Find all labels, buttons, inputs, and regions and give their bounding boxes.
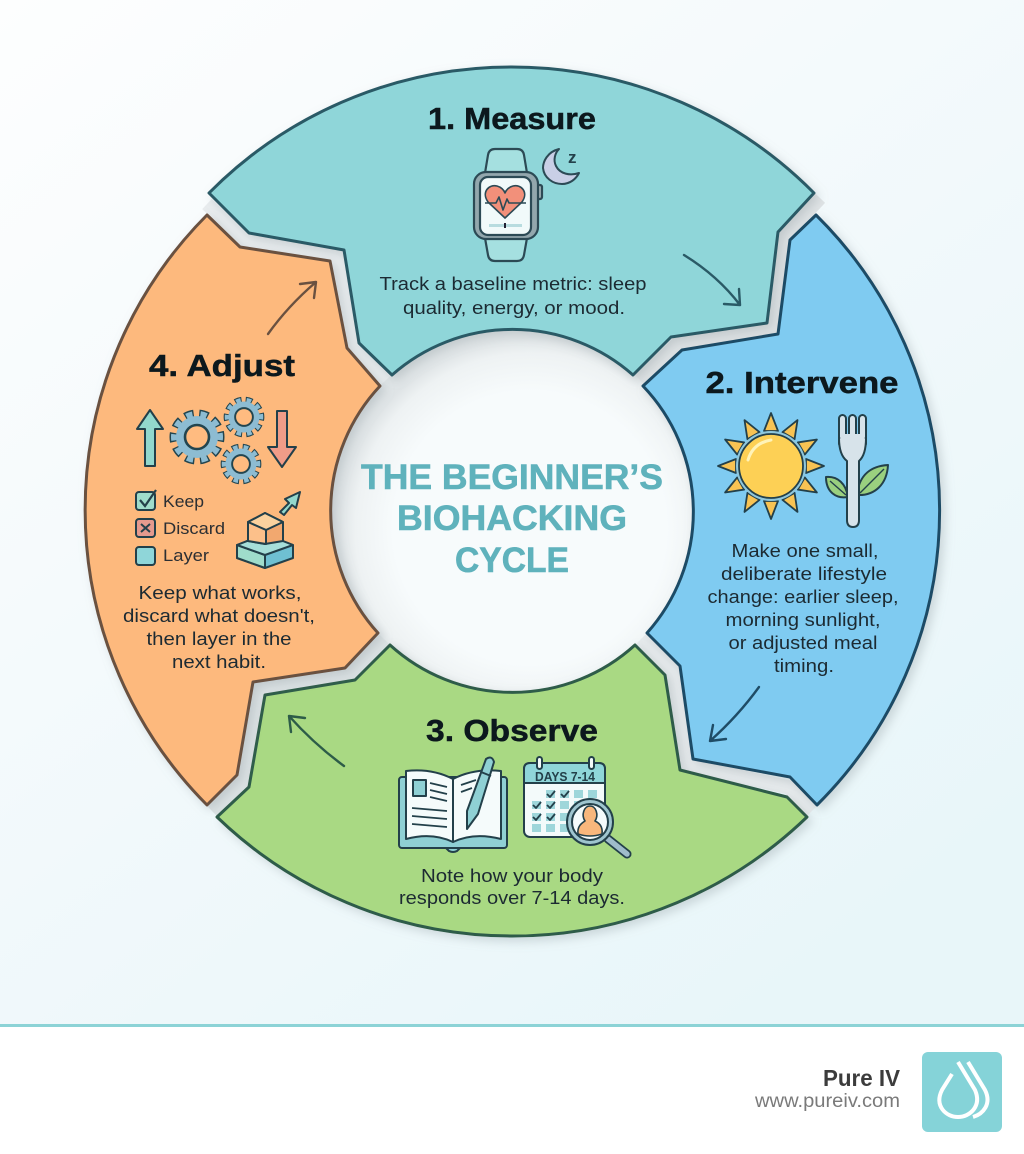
- panel: 1. Measure: [209, 67, 814, 375]
- text: intervene description: or adjusted meal: [728, 633, 878, 653]
- heading: 1. Measure: 1. Measure: [428, 101, 596, 136]
- text: adjust description: Keep what works,: [138, 583, 302, 603]
- gap shading between segments: [207, 198, 820, 811]
- title: the beginner's biohacking cycle: [361, 458, 663, 580]
- text: adjust description: [123, 583, 315, 672]
- icon: smartwatch with heart: [474, 149, 542, 261]
- panel: 3. Observe: [217, 645, 807, 936]
- legend: keep discard layer: Layer: [163, 546, 209, 565]
- icon: moon and z: z: [568, 148, 576, 167]
- heading: 4. Adjust: 4. Adjust: [149, 348, 295, 383]
- arrow: adjust to measure: [268, 282, 316, 334]
- arrow: observe to adjust: [289, 716, 344, 766]
- brand name: Pure IV: [823, 1065, 901, 1091]
- icon: down arrow: [268, 411, 296, 467]
- title: the beginner's biohacking cycle: BIOHACKING: [397, 499, 627, 538]
- text: observe description: responds over 7-14 days.: [399, 888, 625, 908]
- text: adjust description: next habit.: [172, 652, 266, 672]
- legend: keep discard layer: [136, 490, 225, 565]
- legend: keep discard layer: Discard: [163, 519, 225, 538]
- icon: up arrow: [137, 410, 163, 466]
- text: adjust description: then layer in the: [146, 629, 292, 649]
- text: measure description: Track a baseline metric: sleep: [380, 274, 646, 294]
- arrow: intervene to observe: [710, 687, 759, 741]
- website url: www.pureiv.com: [754, 1091, 900, 1112]
- segment shape: adjust: [85, 215, 380, 805]
- text: measure description: quality, energy, or mood.: [403, 298, 625, 318]
- icon: calendar days 7-14 with magnifier: DAYS 7-14: [535, 769, 596, 784]
- footer: [0, 1024, 1024, 1154]
- icon: stacked blocks with arrow: [237, 492, 300, 568]
- segment shape: measure: [209, 67, 814, 375]
- panel: 4. Adjust: [85, 215, 380, 805]
- center disc: [326, 325, 698, 697]
- text: adjust description: discard what doesn't,: [123, 606, 315, 626]
- logo: water drops: [922, 1052, 1002, 1132]
- icon: open journal and pen: [399, 758, 507, 852]
- text: measure description: [380, 274, 646, 318]
- text: observe description: Note how your body: [421, 866, 603, 886]
- text: intervene description: deliberate lifestyle: [721, 564, 887, 584]
- icon: calendar days 7-14 with magnifier: [524, 757, 627, 854]
- text: intervene description: [708, 541, 898, 676]
- text: intervene description: change: earlier sleep,: [708, 587, 898, 607]
- icon: fork with leaves: [826, 415, 888, 527]
- icon: moon and z: [543, 148, 579, 184]
- panel: 2. Intervene: [643, 215, 940, 805]
- segment shape: observe: [217, 645, 807, 936]
- text: intervene description: morning sunlight,: [726, 610, 880, 630]
- arrow: measure to intervene: [684, 255, 740, 305]
- icon: sun: [718, 413, 824, 519]
- text: observe description: [399, 866, 625, 908]
- text: intervene description: timing.: [774, 656, 834, 676]
- title: the beginner's biohacking cycle: THE BEGINNER’S: [361, 458, 663, 497]
- heading: 2. Intervene: 2. Intervene: [706, 365, 898, 400]
- text: intervene description: Make one small,: [732, 541, 878, 561]
- title: the beginner's biohacking cycle: CYCLE: [455, 541, 569, 580]
- heading: 3. Observe: 3. Observe: [426, 713, 598, 748]
- segment shape: intervene: [643, 215, 940, 805]
- legend: keep discard layer: Keep: [163, 492, 204, 511]
- icon: gears: [175, 401, 260, 480]
